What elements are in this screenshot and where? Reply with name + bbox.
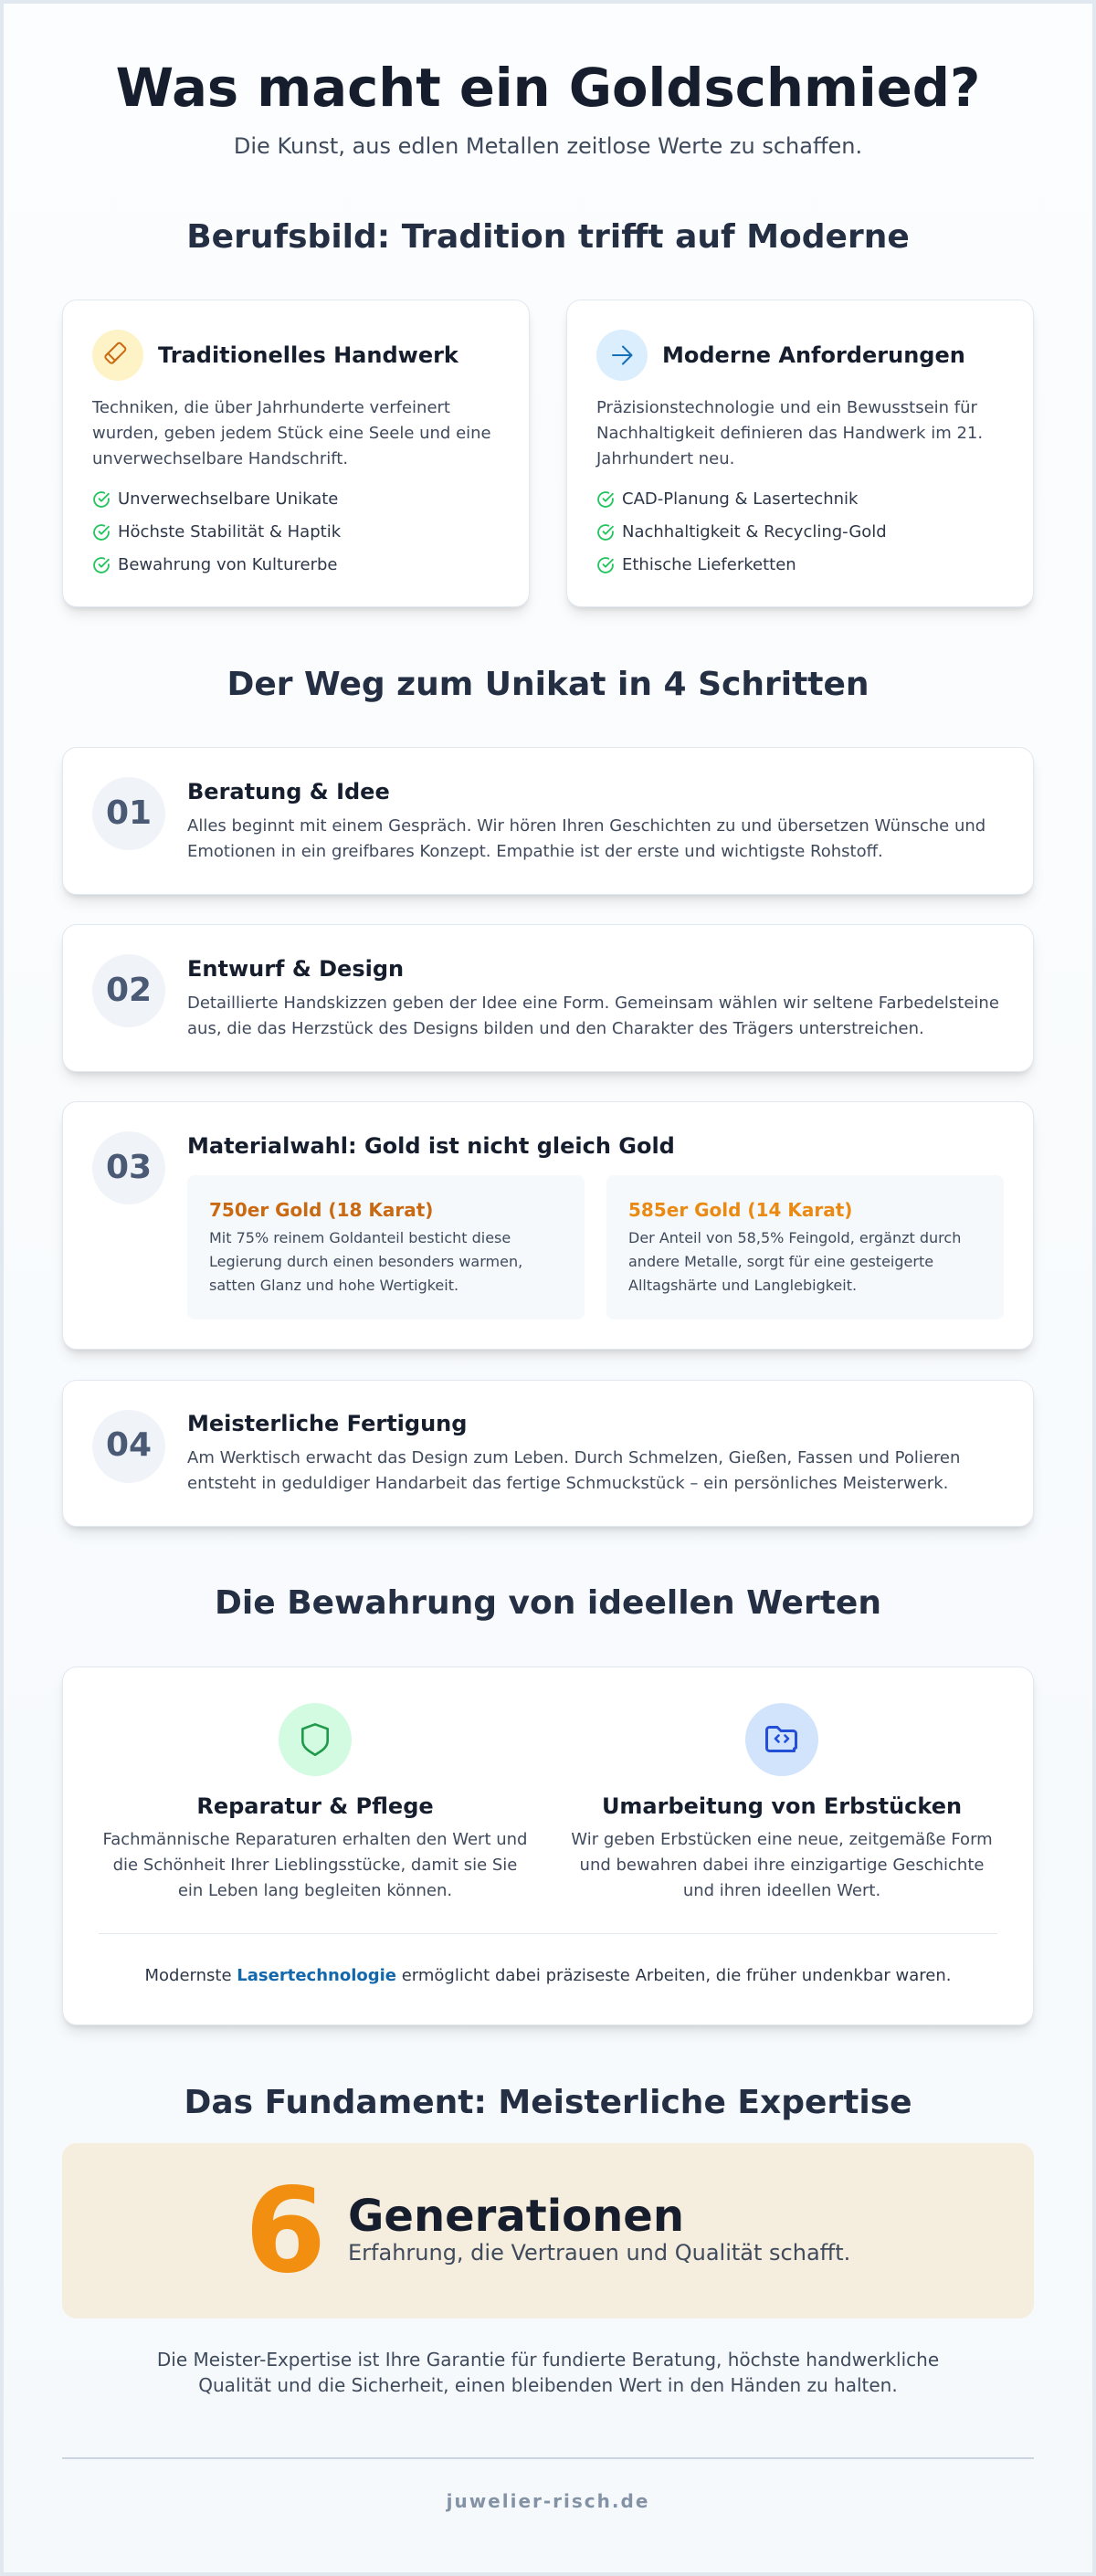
step number: [92, 1131, 165, 1204]
list item: Unverwechselbare Unikate: [118, 489, 338, 509]
step text: [187, 994, 999, 1038]
step number: [92, 954, 165, 1027]
step text: [187, 816, 985, 861]
repair heading: Reparatur & Pflege: [196, 1793, 434, 1819]
list item: Nachhaltigkeit & Recycling-Gold: [622, 522, 887, 541]
subtitle: Die Kunst, aus edlen Metallen zeitlose Werte zu schaffen.: [234, 133, 862, 159]
gold text: Legierung durch einen besonders warmen,: [209, 1253, 522, 1270]
step number: 03: [106, 1149, 152, 1186]
step number: [92, 777, 165, 850]
rework text: [571, 1830, 993, 1900]
card text: [595, 398, 983, 468]
card text: Nachhaltigkeit definieren das Handwerk im 21.: [596, 424, 983, 443]
closing text: [157, 2349, 939, 2396]
big number: 6: [245, 2163, 326, 2299]
title: Was macht ein Goldschmied?: [116, 58, 980, 119]
card heading: Traditionelles Handwerk: [158, 342, 458, 368]
footer: juwelier-risch.de: [447, 2490, 649, 2512]
panel: modern requirements: [564, 300, 1036, 616]
icon: arrow right: [596, 330, 648, 381]
step heading: Materialwahl: Gold ist nicht gleich Gold: [187, 1133, 675, 1159]
stat text: Erfahrung, die Vertrauen und Qualität schafft.: [348, 2240, 850, 2266]
card text: unverwechselbare Handschrift.: [92, 449, 348, 468]
gold text: [209, 1229, 522, 1294]
gold text: Mit 75% reinem Goldanteil besticht diese: [209, 1229, 511, 1246]
list item: Bewahrung von Kulturerbe: [118, 555, 338, 574]
gold text: Der Anteil von 58,5% Feingold, ergänzt durch: [628, 1229, 961, 1246]
stat label: Generationen: [348, 2191, 684, 2242]
step number: 04: [106, 1426, 152, 1464]
panel: step 3: [62, 1101, 1034, 1350]
step text: Am Werktisch erwacht das Design zum Leben. Durch Schmelzen, Gießen, Fassen und Polieren: [187, 1448, 960, 1467]
step text: entsteht in geduldiger Handarbeit das fertige Schmuckstück – ein persönliches Meisterwerk.: [187, 1474, 948, 1493]
panel: step 1: [62, 747, 1034, 895]
gold text: satten Glanz und hohe Wertigkeit.: [209, 1277, 458, 1294]
step heading: Meisterliche Fertigung: [187, 1411, 467, 1436]
step number: 02: [106, 972, 152, 1009]
step text: Alles beginnt mit einem Gespräch. Wir hören Ihren Geschichten zu und übersetzen Wünsche und: [187, 816, 985, 836]
heading: Fundament: Das Fundament: Meisterliche Expertise: [184, 2084, 912, 2121]
card text: wurden, geben jedem Stück eine Seele und eine: [92, 424, 491, 443]
step text: Emotionen in ein greifbares Konzept. Empathie ist der erste und wichtigste Rohstoff.: [187, 842, 883, 861]
heading: ideelle Werte: Die Bewahrung von ideellen Werten: [215, 1584, 881, 1622]
heading: Der Weg: Der Weg zum Unikat in 4 Schritten: [227, 666, 869, 703]
repair text: ein Leben lang begleiten können.: [178, 1881, 452, 1900]
list item: CAD-Planung & Lasertechnik: [622, 489, 858, 509]
repair text: Fachmännische Reparaturen erhalten den Wert und: [103, 1830, 527, 1849]
gold heading: 750er Gold (18 Karat): [209, 1199, 433, 1221]
closing text: Die Meister-Expertise ist Ihre Garantie für fundierte Beratung, höchste handwerkliche: [157, 2349, 939, 2371]
card text: [91, 398, 491, 468]
list item: Höchste Stabilität & Haptik: [118, 522, 341, 541]
card text: Techniken, die über Jahrhunderte verfeinert: [92, 398, 450, 416]
panel: step 2: [62, 924, 1034, 1072]
card heading: Moderne Anforderungen: [662, 342, 965, 368]
repair text: die Schönheit Ihrer Lieblingsstücke, damit sie Sie: [113, 1856, 517, 1875]
rework heading: Umarbeitung von Erbstücken: [602, 1793, 962, 1819]
gold text: [628, 1229, 961, 1294]
laser note: Modernste Lasertechnologie ermöglicht dabei präziseste Arbeiten, die früher undenkbar waren.: [145, 1966, 951, 1985]
step text: [187, 1448, 960, 1493]
repair text: [103, 1830, 527, 1900]
heading: Berufsbild: Berufsbild: Tradition trifft auf Moderne: [186, 218, 910, 256]
panel: step 4: [62, 1380, 1034, 1527]
rework text: und bewahren dabei ihre einzigartige Geschichte: [580, 1856, 984, 1875]
rework text: und ihren ideellen Wert.: [683, 1881, 880, 1900]
step text: Detaillierte Handskizzen geben der Idee eine Form. Gemeinsam wählen wir seltene Farbedelsteine: [187, 994, 999, 1013]
rework text: Wir geben Erbstücken eine neue, zeitgemäße Form: [571, 1830, 993, 1849]
step text: aus, die das Herzstück des Designs bilden und den Charakter des Trägers unterstreichen.: [187, 1019, 924, 1038]
icon: shield: [279, 1703, 352, 1776]
step heading: Entwurf & Design: [187, 956, 404, 982]
panel: traditional craft: [60, 300, 532, 616]
panel: preservation: [62, 1667, 1034, 2025]
gold text: Alltagshärte und Langlebigkeit.: [628, 1277, 857, 1294]
step number: 01: [106, 794, 152, 832]
gold heading: 585er Gold (14 Karat): [628, 1199, 852, 1221]
card text: Präzisionstechnologie und ein Bewusstsein für: [596, 398, 977, 416]
step number: [92, 1410, 165, 1483]
panel: six generations: [62, 2143, 1034, 2318]
icon: folder with code: [745, 1703, 818, 1776]
list item: Ethische Lieferketten: [622, 555, 796, 574]
panel: 585 gold: [606, 1175, 1004, 1320]
card text: Jahrhundert neu.: [596, 449, 734, 468]
step heading: Beratung & Idee: [187, 779, 390, 804]
panel: 750 gold: [187, 1175, 585, 1320]
closing text: Qualität und die Sicherheit, einen bleibenden Wert in den Händen zu halten.: [198, 2374, 898, 2396]
icon: eraser tool: [92, 330, 143, 381]
gold text: andere Metalle, sorgt für eine gesteigerte: [628, 1253, 933, 1270]
